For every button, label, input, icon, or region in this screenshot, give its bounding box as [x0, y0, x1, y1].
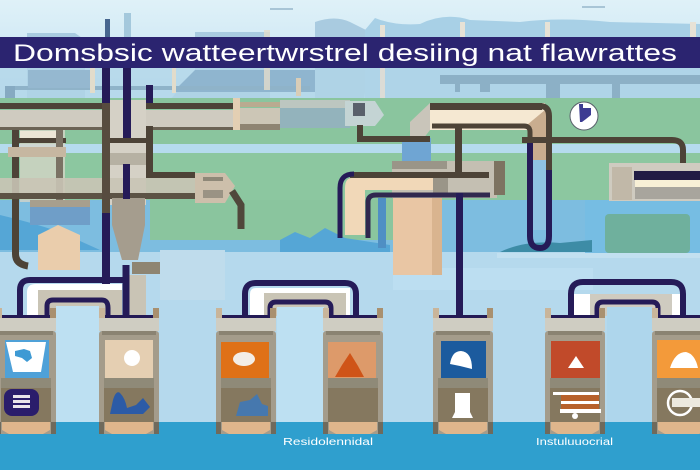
distant skyline [0, 6, 700, 100]
icon: flame panel [328, 342, 376, 378]
cabinet 3 [216, 308, 276, 434]
sky background [0, 0, 700, 100]
cabinet 2 [99, 308, 159, 434]
flange [233, 98, 240, 130]
icon: blue tool [236, 394, 268, 416]
filter settling tank [30, 205, 90, 225]
long dark return pipe [522, 140, 683, 170]
icon: white cloud panel [105, 340, 153, 378]
navy U bend [530, 140, 549, 248]
elbow to valve [149, 145, 195, 175]
connector pipes for cabinets [20, 265, 683, 426]
cabinet 7 [652, 308, 700, 434]
central pipe housing [110, 100, 146, 205]
icon: red triangle panel [551, 341, 600, 378]
water strip [0, 422, 700, 470]
long vertical pipe [455, 128, 462, 175]
connector arc 2 [245, 283, 356, 425]
tan tank [393, 198, 442, 275]
cabinet 5 [433, 308, 493, 434]
connector pipe [240, 108, 280, 128]
tank cross line [110, 138, 150, 143]
icon: white column [452, 393, 473, 418]
right pump unit [609, 163, 700, 201]
brown vertical pipe [102, 100, 110, 214]
icon: layered list [553, 392, 601, 419]
cabinet 6 [545, 308, 605, 434]
outlet bend [232, 191, 241, 229]
left glass tank [20, 130, 65, 202]
blue-gray pipe section [280, 100, 350, 128]
horizontal manifold [392, 161, 497, 198]
cabinet 4 [323, 308, 383, 434]
pipe from valve [360, 125, 430, 139]
left main pipe [0, 110, 233, 128]
center pipe assembly [233, 98, 700, 317]
label: industrial: Instuluuocrial [536, 437, 613, 448]
green ground band [0, 98, 700, 203]
right elbow pipe [428, 103, 545, 130]
cream elbow pipe [345, 178, 433, 235]
water channel stripe [0, 144, 700, 153]
icon: blue dome panel [441, 341, 486, 378]
valve body [195, 173, 235, 203]
icon: orange panel [221, 342, 269, 378]
title bar [0, 37, 700, 68]
left pipe network [0, 13, 241, 316]
label: residential: Residolennidal [283, 437, 373, 448]
icon: orange dome panel [657, 340, 700, 378]
lower blue field [0, 200, 700, 252]
connector arc 3 [571, 282, 683, 425]
navy lower vertical [102, 68, 110, 103]
blue feed [402, 138, 431, 162]
lower branch pipe [0, 178, 195, 194]
icon: white shoe [668, 391, 700, 415]
upper navy vertical [123, 68, 131, 138]
icon: water drop panel [5, 340, 49, 378]
central funnel [112, 198, 145, 260]
connector arc 1 [20, 265, 126, 426]
icon: water drop badge [570, 102, 598, 130]
right basin [497, 200, 700, 258]
title: Domsbsic watteertwrstrel desiing nat flawrattes [13, 40, 677, 67]
icon: menu list [4, 389, 39, 416]
icon: blue figures [110, 392, 150, 414]
navy elbow [368, 195, 490, 238]
cabinet 1 [0, 308, 56, 434]
